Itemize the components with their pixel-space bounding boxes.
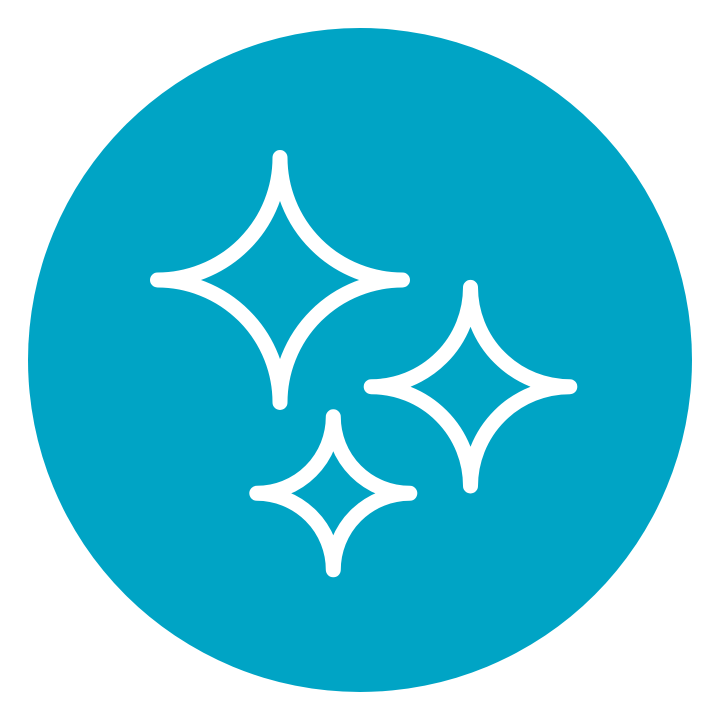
large sparkle [158,158,402,402]
medium sparkle [371,287,570,486]
small sparkle [257,417,410,570]
